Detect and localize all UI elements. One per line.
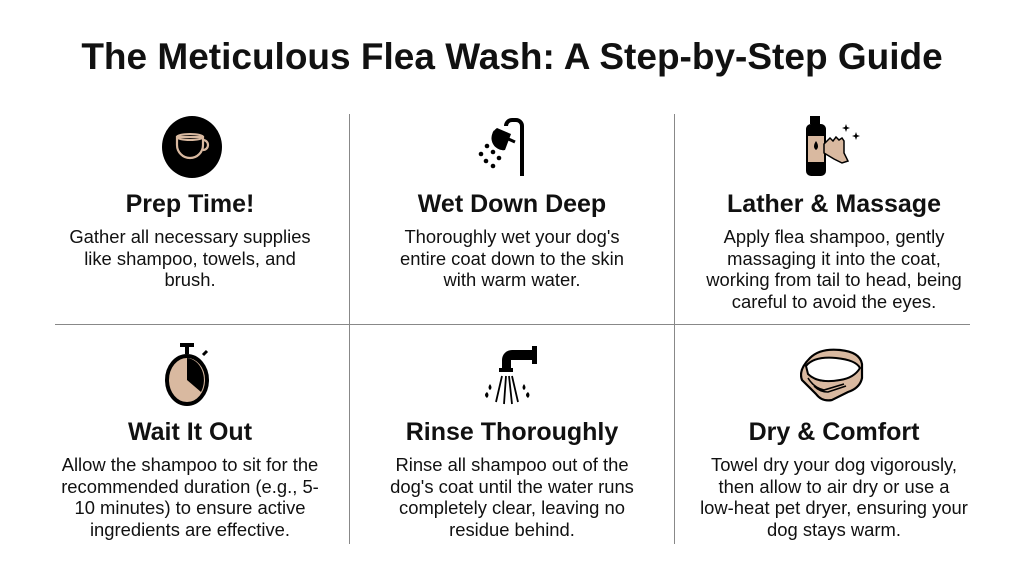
panel: rinse thoroughly: completely clear, leaving no — [399, 497, 625, 518]
panel: lather & massage: Apply flea shampoo, gently — [724, 226, 944, 247]
divider lines — [349, 114, 350, 544]
panel: dry & comfort: Dry & Comfort — [749, 418, 919, 446]
panel: wet down deep — [400, 190, 624, 290]
panel: dry & comfort: dog stays warm. — [767, 518, 901, 540]
panel: wait it out: recommended duration (e.g., 5- — [61, 476, 319, 496]
icon: faucet — [485, 346, 537, 404]
panel: rinse thoroughly: Rinse Thoroughly — [406, 418, 618, 446]
panel: lather & massage: Lather & Massage — [727, 190, 941, 218]
panel: wait it out: Wait It Out — [128, 418, 252, 446]
panel: wait it out — [61, 418, 319, 540]
panel: rinse thoroughly: dog's coat until the water runs — [390, 476, 634, 496]
icon: towel — [800, 348, 864, 402]
icon: coffee cup — [162, 116, 222, 178]
panel: wait it out: ingredients are effective. — [90, 518, 290, 540]
panel: rinse thoroughly — [390, 418, 634, 540]
panel: wet down deep: entire coat down to the skin — [400, 248, 624, 268]
panel: prep time: brush. — [164, 269, 216, 290]
panel: wet down deep: Wet Down Deep — [418, 190, 606, 218]
panel: dry & comfort — [700, 418, 968, 540]
panel: wet down deep: Thoroughly wet your dog's — [404, 226, 620, 247]
panel: lather & massage: working from tail to head, being — [706, 269, 962, 290]
panel: rinse thoroughly: residue behind. — [449, 518, 575, 540]
panel: lather & massage: careful to avoid the eyes. — [732, 290, 936, 312]
panel: prep time: Prep Time! — [126, 190, 254, 218]
icon: stopwatch — [165, 343, 209, 406]
title: The Meticulous Flea Wash: A Step-by-Step Guide — [81, 36, 943, 77]
panel: lather & massage — [706, 190, 962, 312]
panel: prep time — [69, 190, 311, 290]
panel: wait it out: 10 minutes) to ensure active — [74, 497, 306, 518]
panel: dry & comfort: then allow to air dry or use a — [718, 476, 950, 496]
panel: rinse thoroughly: Rinse all shampoo out of the — [395, 454, 629, 475]
panel: dry & comfort: Towel dry your dog vigorously, — [711, 454, 957, 475]
icon: shower — [478, 118, 524, 176]
panel: prep time: like shampoo, towels, and — [84, 248, 296, 268]
panel: wait it out: Allow the shampoo to sit for the — [62, 454, 318, 475]
panel: prep time: Gather all necessary supplies — [69, 226, 311, 247]
panel: wet down deep: with warm water. — [444, 269, 580, 290]
panel: dry & comfort: low-heat pet dryer, ensuring your — [700, 497, 968, 518]
icon: shampoo bottle — [806, 116, 860, 176]
panel: lather & massage: massaging it into the coat, — [727, 248, 941, 268]
